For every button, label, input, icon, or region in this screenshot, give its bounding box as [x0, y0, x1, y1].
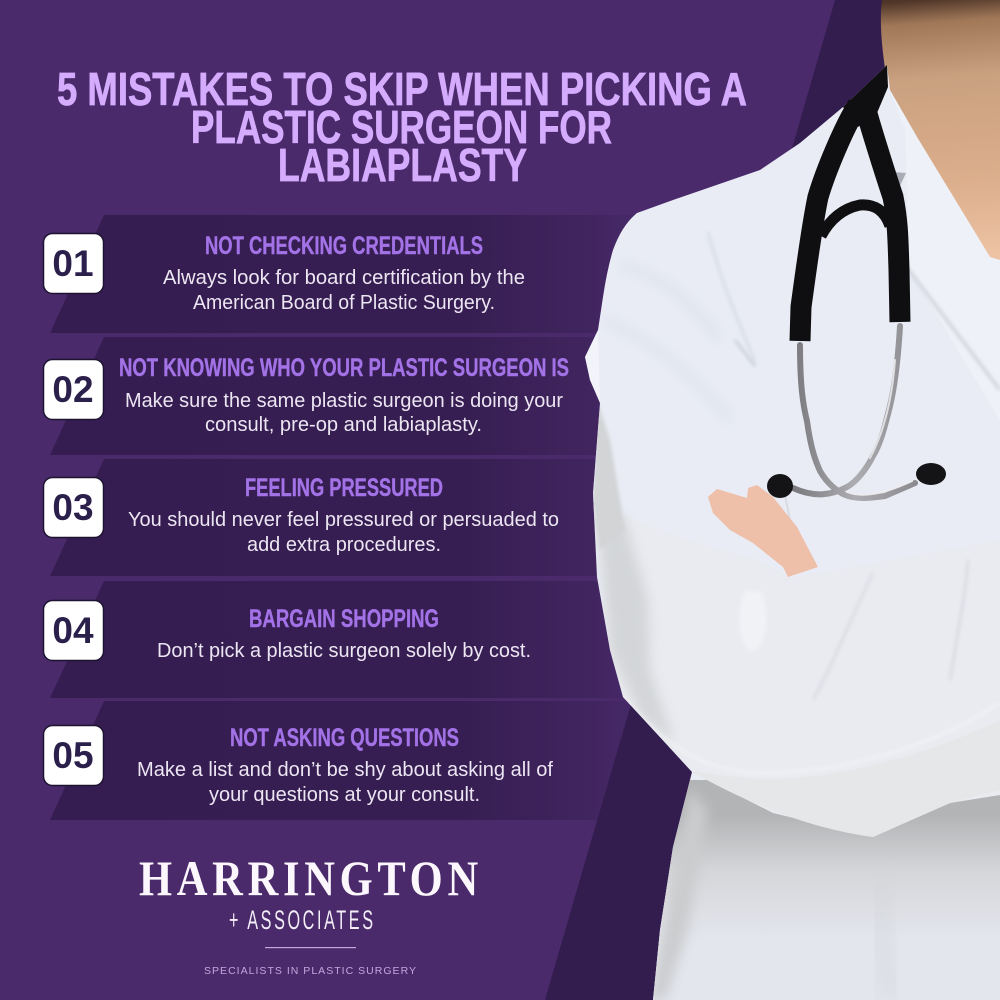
number badge 03: 03	[52, 487, 94, 528]
body 05	[137, 759, 553, 806]
folded forearm	[593, 500, 1000, 837]
number badge 04: 04	[52, 610, 94, 651]
title: PLASTIC SURGEON FOR	[191, 101, 612, 153]
white coat	[585, 65, 1000, 1000]
number badge 03	[44, 478, 104, 538]
dark diagonal panel	[545, 0, 1000, 1000]
hand	[708, 485, 818, 577]
number badge 01	[44, 234, 104, 294]
heading 02: NOT KNOWING WHO YOUR PLASTIC SURGEON IS	[119, 354, 569, 382]
sleeve folds	[708, 232, 755, 362]
body 02: consult, pre-op and labiaplasty.	[205, 414, 482, 436]
logo wordmark: HARRINGTON	[139, 852, 478, 907]
lower coat body	[640, 780, 1000, 1000]
logo subline: + ASSOCIATES	[229, 905, 373, 935]
number badge 04	[44, 600, 104, 660]
body 05: Make a list and don’t be shy about asking all of	[137, 759, 553, 781]
mistake 05	[44, 724, 553, 806]
mistake 03	[44, 474, 559, 556]
mistake 01	[44, 232, 525, 314]
number badge 02: 02	[52, 369, 94, 410]
neck skin	[880, 0, 1000, 300]
heading 04: BARGAIN SHOPPING	[249, 605, 439, 633]
stethoscope metal tubes	[793, 326, 915, 498]
stethoscope ear tips	[767, 463, 946, 498]
title: LABIAPLASTY	[278, 139, 527, 191]
mistake 04	[44, 600, 531, 662]
mistake row panels	[50, 215, 640, 820]
mistake 02	[44, 354, 569, 436]
stethoscope black tubing	[800, 65, 900, 341]
body 01: American Board of Plastic Surgery.	[193, 292, 495, 314]
body 05: your questions at your consult.	[209, 784, 480, 806]
body 02: Make sure the same plastic surgeon is doing your	[125, 390, 563, 412]
body 03: add extra procedures.	[247, 534, 441, 556]
title	[57, 63, 747, 191]
logo tagline: SPECIALISTS IN PLASTIC SURGERY	[204, 965, 416, 977]
right lapel	[890, 91, 1000, 260]
title: 5 MISTAKES TO SKIP WHEN PICKING A	[57, 63, 747, 115]
number badge 05	[44, 726, 104, 786]
body 03: You should never feel pressured or persuaded to	[128, 509, 559, 531]
number badge 01: 01	[52, 243, 94, 284]
heading 03: FEELING PRESSURED	[245, 474, 443, 502]
body 03	[128, 509, 559, 556]
body 04: Don’t pick a plastic surgeon solely by cost.	[157, 640, 531, 662]
body 01: Always look for board certification by the	[163, 267, 525, 289]
number badge 02	[44, 360, 104, 420]
body 02	[125, 390, 563, 436]
body 01	[163, 267, 525, 314]
logo rule	[265, 947, 356, 948]
doctor illustration	[585, 0, 1000, 1000]
logo	[139, 852, 478, 977]
heading 05: NOT ASKING QUESTIONS	[230, 724, 459, 752]
number badge 05: 05	[52, 735, 94, 776]
heading 01: NOT CHECKING CREDENTIALS	[205, 232, 483, 260]
coat shading	[585, 90, 1000, 1000]
